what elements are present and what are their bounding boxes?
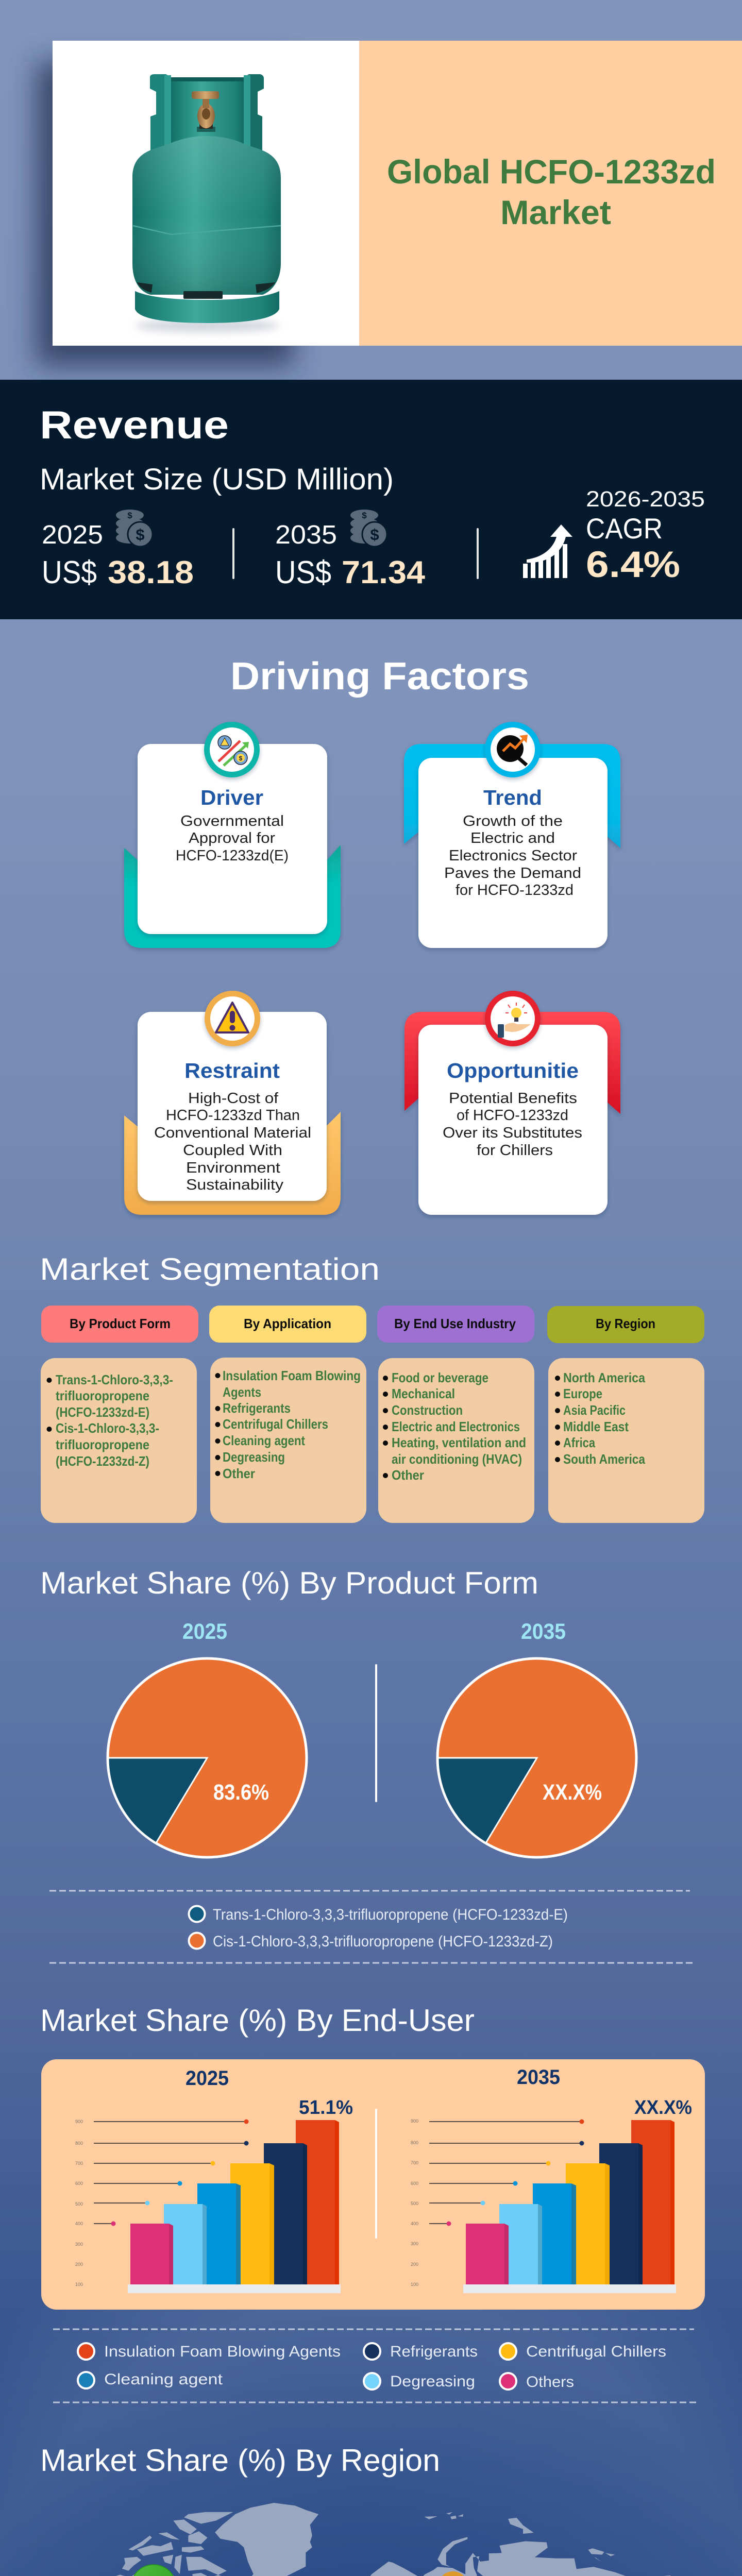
card heading: Opportunitie [447, 1059, 579, 1082]
card text: Electronics Sector [449, 848, 577, 864]
list box: air conditioning (HVAC) [392, 1451, 522, 1467]
divider [375, 2109, 377, 2239]
icon: opportunity [485, 991, 541, 1046]
heading: market segmentation: Market Segmentation [40, 1252, 380, 1286]
metric: CAGR: 6.4% [586, 545, 680, 585]
legend: end-user [78, 2343, 666, 2391]
icon: growth chart arrow [523, 524, 572, 578]
bar chart: 2035: 500 [411, 2201, 418, 2206]
bar chart: 2035: 800 [411, 2140, 418, 2145]
icon: coins 2035: $ [370, 526, 379, 544]
heading: market share by product form: Market Share (%) By Product Form [40, 1566, 538, 1600]
panel: by region: By Region [596, 1316, 655, 1331]
list box: Cleaning agent [223, 1433, 305, 1448]
metric: CAGR [586, 487, 705, 585]
bar chart: 2025: 900 [75, 2119, 83, 2124]
card text: of HCFO-1233zd [457, 1107, 568, 1124]
list box: Europe [563, 1386, 602, 1401]
bar chart: 2035: 600 [411, 2181, 418, 2186]
bar chart: 2025: 2025 [185, 2067, 229, 2090]
panel: by end use industry [377, 1306, 534, 1523]
bar chart: 2035: 700 [411, 2160, 418, 2165]
list box: Centrifugal Chillers [223, 1416, 328, 1432]
title: Global HCFO-1233zd [387, 152, 716, 191]
card text: HCFO-1233zd Than [166, 1107, 300, 1124]
list box: Insulation Foam Blowing [223, 1368, 361, 1383]
panel: hero banner [36, 41, 742, 366]
list box: Refrigerants [223, 1400, 291, 1416]
card text [444, 813, 581, 899]
bar chart: 2025: 800 [75, 2141, 83, 2146]
list box: (HCFO-1233zd-E) [56, 1404, 149, 1420]
legend: end-user: Insulation Foam Blowing Agents [104, 2343, 341, 2360]
title panel [359, 41, 742, 346]
list box: Other [392, 1467, 424, 1483]
metric: 2025 revenue [42, 520, 194, 590]
icon: coins 2025 [116, 510, 153, 547]
divider [232, 528, 234, 579]
bar chart: 2025: 400 [75, 2221, 83, 2226]
map pin: europe [439, 2571, 467, 2576]
icon: trend [485, 722, 541, 777]
icon: restraint [205, 991, 260, 1046]
list box: Asia Pacific [563, 1402, 626, 1418]
list box: Food or beverage [392, 1370, 488, 1385]
list box: Degreasing [223, 1449, 285, 1465]
list box [210, 1358, 366, 1523]
divider [477, 528, 479, 579]
metric: CAGR: CAGR [586, 512, 663, 545]
card text: Governmental [180, 813, 284, 829]
pie chart: 2035: 2035 [521, 1619, 566, 1644]
list box: Construction [392, 1402, 463, 1418]
bar chart: 2035: 2035 [517, 2066, 560, 2089]
map pin: north america [131, 2565, 176, 2576]
icon: coins 2025: $ [136, 526, 145, 544]
bar chart: 2035: 200 [411, 2262, 418, 2267]
legend: product form: Trans-1-Chloro-3,3,3-trifluoropropene (HCFO-1233zd-E) [213, 1906, 568, 1923]
card text: Growth of the [463, 813, 563, 829]
icon: driver [204, 722, 260, 777]
card text: for Chillers [477, 1142, 553, 1159]
panel: bar charts [41, 2059, 705, 2310]
card text: High-Cost of [188, 1090, 279, 1107]
pie chart: 2035: XX.X% [543, 1780, 602, 1805]
metric: 2025 revenue: 38.18 [108, 555, 194, 590]
icon: coins 2035: $ [362, 511, 367, 520]
bar chart: 2025: 600 [75, 2181, 83, 2186]
card text [176, 813, 289, 864]
panel: driver card [124, 722, 341, 948]
heading: market share by end-user: Market Share (%) By End-User [40, 2003, 475, 2038]
card heading: Driver [200, 786, 263, 809]
card text: Coupled With [183, 1142, 282, 1159]
metric: 2035 revenue: 2035 [275, 520, 337, 549]
metric: CAGR: 2026-2035 [586, 487, 705, 512]
panel: by application: By Application [244, 1316, 331, 1331]
heading: market share by region: Market Share (%) By Region [40, 2443, 440, 2478]
bar chart: 2035 [411, 2066, 692, 2293]
legend: end-user: Others [526, 2374, 574, 2391]
bar chart: 2035: 300 [411, 2241, 418, 2246]
panel: by region [547, 1306, 704, 1523]
metric: 2035 revenue [275, 520, 426, 590]
bar chart: 2035: 100 [411, 2282, 418, 2287]
card text: HCFO-1233zd(E) [176, 848, 289, 864]
panel: revenue [0, 380, 742, 619]
list box: Cis-1-Chloro-3,3,3- [56, 1420, 159, 1436]
card text: Electric and [470, 830, 555, 846]
pie chart: 2025: 2025 [182, 1619, 227, 1644]
card heading: Trend [483, 786, 542, 809]
icon: driver: $ [239, 755, 243, 762]
list box: Middle East [563, 1419, 629, 1434]
legend: end-user: Cleaning agent [104, 2371, 223, 2388]
pie chart: 2025 [108, 1619, 307, 1857]
list box: trifluoropropene [56, 1388, 149, 1403]
legend: end-user: Centrifugal Chillers [526, 2343, 666, 2360]
legend: product form: Cis-1-Chloro-3,3,3-trifluoropropene (HCFO-1233zd-Z) [213, 1933, 553, 1950]
bar chart: 2025: 100 [75, 2282, 83, 2287]
icon: coins 2035 [350, 510, 387, 547]
legend: product form [189, 1906, 568, 1950]
bar chart: 2025 [75, 2067, 353, 2293]
bar chart: 2025: 700 [75, 2161, 83, 2166]
panel: opportunity card [404, 991, 620, 1215]
bar chart: 2025: 300 [75, 2242, 83, 2247]
panel: by end use industry: By End Use Industry [394, 1316, 516, 1331]
metric: 2025 revenue: 2025 [42, 520, 103, 549]
title [387, 152, 716, 231]
subheading: market size: Market Size (USD Million) [40, 463, 394, 496]
list box [41, 1358, 197, 1523]
card text: Sustainability [186, 1177, 284, 1193]
list box: (HCFO-1233zd-Z) [56, 1453, 149, 1469]
card text: Approval for [189, 830, 275, 846]
list box: Electric and Electronics [392, 1419, 520, 1434]
list box: Trans-1-Chloro-3,3,3- [56, 1372, 173, 1387]
title: Market [500, 193, 611, 231]
card text: for HCFO-1233zd [456, 882, 574, 899]
metric: 2025 revenue: US$ [42, 555, 97, 590]
list box: Agents [223, 1384, 261, 1400]
list box: Mechanical [392, 1386, 455, 1401]
card text: Paves the Demand [444, 865, 581, 882]
card text: Conventional Material [154, 1125, 311, 1141]
metric: 2035 revenue: 71.34 [342, 555, 426, 590]
card text [443, 1090, 582, 1159]
bar chart: 2025: 200 [75, 2262, 83, 2267]
divider [375, 1664, 377, 1802]
metric: 2035 revenue: US$ [275, 555, 331, 590]
panel: by application [209, 1306, 366, 1523]
card text: Potential Benefits [449, 1090, 577, 1107]
panel: restraint card [124, 991, 341, 1215]
list box [378, 1358, 534, 1523]
product photo panel [53, 41, 360, 346]
legend: end-user: Degreasing [390, 2373, 475, 2390]
icon: coins 2025: $ [127, 511, 132, 520]
bar chart: 2035: 400 [411, 2221, 418, 2226]
card text: Environment [186, 1160, 280, 1176]
bar chart: 2035: 900 [411, 2119, 418, 2124]
icon: gas cylinder [132, 74, 281, 332]
panel: trend card [404, 722, 620, 948]
card heading: Restraint [184, 1059, 280, 1082]
pie chart: 2025: 83.6% [213, 1780, 269, 1805]
list box [548, 1358, 704, 1523]
card text [154, 1090, 311, 1193]
heading: driving factors: Driving Factors [230, 654, 529, 698]
list box: trifluoropropene [56, 1437, 149, 1452]
bar chart: 2025: 51.1% [299, 2097, 353, 2119]
list box: Heating, ventilation and [392, 1435, 526, 1450]
bar chart: 2025: 500 [75, 2201, 83, 2207]
bar chart: 2035: XX.X% [634, 2097, 692, 2119]
heading: revenue: Revenue [40, 403, 229, 447]
list box: South America [563, 1451, 645, 1467]
card text: Over its Substitutes [443, 1125, 582, 1141]
legend: end-user: Refrigerants [390, 2343, 478, 2360]
world map [52, 2503, 684, 2576]
list box: North America [563, 1370, 645, 1385]
panel: by product form [41, 1306, 198, 1523]
list box: Other [223, 1466, 255, 1481]
list box: Africa [563, 1435, 595, 1450]
pie chart: 2035 [437, 1619, 636, 1857]
panel: by product form: By Product Form [70, 1316, 171, 1331]
